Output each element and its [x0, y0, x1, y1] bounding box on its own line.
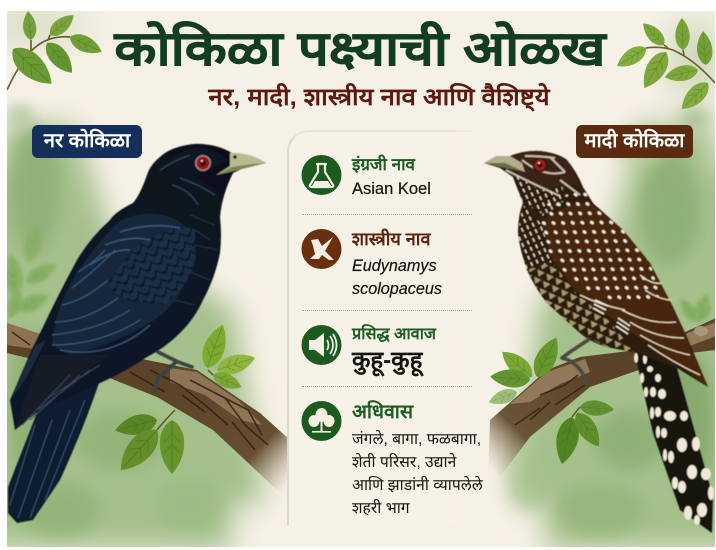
icon: bird silhouette: [302, 229, 342, 269]
info row: English name: [302, 154, 431, 198]
icon: speaker: [302, 325, 342, 365]
illustration: male koel: [8, 144, 266, 523]
body: [484, 151, 708, 387]
divider: [302, 386, 472, 387]
branch: left: [7, 323, 290, 500]
feet: [155, 352, 192, 390]
breast scales: [527, 262, 634, 352]
wing: [52, 214, 196, 355]
head sheen: [173, 147, 228, 176]
feet: [562, 340, 588, 385]
illustration: female koel: [484, 151, 714, 533]
head: [510, 151, 580, 190]
value: habitat description: आणि झाडांनी व्यापलेले: [352, 477, 483, 494]
info row: scientific name: [302, 228, 442, 298]
subtitle: नर, मादी, शास्त्रीय नाव आणि वैशिष्ट्ये: [208, 84, 549, 111]
panel: central information card: [287, 130, 477, 525]
info row: habitat: [302, 400, 483, 517]
leaves on right branch: [487, 333, 614, 466]
leaves top-right corner: [613, 18, 715, 115]
neck stripes: [513, 176, 564, 214]
badge: female koel: मादी कोकिळा: [585, 130, 684, 152]
pale background leaves right: [680, 294, 712, 324]
upper breast dashes: [518, 205, 552, 270]
badge: female koel: [576, 125, 693, 158]
tail: [634, 350, 713, 533]
label: famous call heading: प्रसिद्ध आवाज: [352, 325, 436, 343]
label: English name heading: इंग्रजी नाव: [352, 155, 415, 174]
leaves top-left corner: [5, 10, 105, 92]
value: Eudynamys scolopaceus: [352, 257, 442, 298]
leaves on left branch: [112, 321, 258, 478]
icon: trees: [302, 401, 342, 441]
tail: [8, 380, 100, 523]
body: [10, 144, 266, 430]
beak: [216, 153, 266, 175]
pale background leaves left: [7, 227, 56, 318]
label: scientific name heading: शास्त्रीय नाव: [352, 229, 430, 249]
divider: [302, 214, 472, 215]
value: habitat description: जंगले, बागा, फळबागा,: [352, 431, 481, 448]
value: Eudynamys scolopaceus: scolopaceus: [352, 280, 442, 298]
badge: male koel: [32, 125, 142, 158]
value: habitat description: [352, 430, 483, 517]
divider: [302, 310, 472, 311]
eye: [195, 155, 211, 171]
badge: male koel: नर कोकिळा: [44, 130, 130, 152]
branch: right: [488, 318, 716, 480]
eye: [532, 158, 548, 172]
info row: famous call: [302, 324, 436, 377]
title: कोकिळा पक्ष्याची ओळख: [114, 23, 606, 76]
value: Asian Koel: Asian Koel: [352, 180, 431, 198]
value: habitat description: शेती परिसर, उद्याने: [352, 454, 456, 471]
white wing spots: [540, 187, 660, 305]
breast texture: [175, 215, 218, 305]
beak: [484, 156, 525, 172]
value: kuhu-kuhu: कुहू-कुहू: [352, 347, 422, 374]
value: habitat description: शहरी भाग: [352, 500, 410, 517]
icon: flask: [302, 155, 342, 195]
wing: [543, 203, 708, 387]
value: Eudynamys scolopaceus: Eudynamys: [352, 257, 437, 275]
label: habitat heading: अधिवास: [352, 400, 413, 422]
